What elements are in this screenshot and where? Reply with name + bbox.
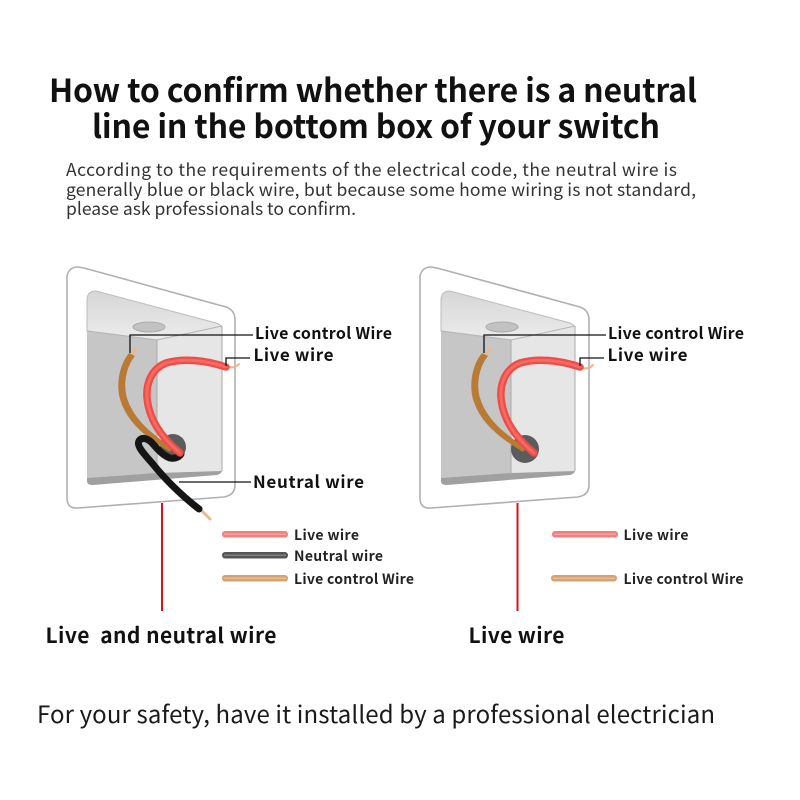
- red live wire: [147, 360, 239, 453]
- brown live control wire: [118, 349, 173, 452]
- label: live wire: Live wire: [608, 341, 688, 366]
- red connector line: [516, 503, 518, 611]
- red live wire: [501, 360, 593, 453]
- legend: Neutral wire: [294, 546, 383, 566]
- legend: [551, 525, 744, 589]
- intro text block: please ask professionals to confirm.: [66, 196, 356, 221]
- caption: live and neutral wire: Live and neutral wire: [46, 620, 276, 650]
- caption: live wire: Live wire: [468, 620, 564, 650]
- legend: Live wire: [294, 525, 359, 545]
- legend: [222, 525, 414, 589]
- panel: live wire only diagram: [420, 267, 744, 650]
- label: live wire: Live wire: [254, 341, 334, 366]
- switch box plate: [420, 267, 589, 508]
- cable hole: [511, 435, 539, 463]
- label: neutral wire: Neutral wire: [253, 468, 364, 493]
- legend: Live control Wire: [624, 569, 744, 589]
- legend: Live wire: [624, 525, 688, 545]
- switch box plate: [67, 267, 235, 508]
- cable hole: [160, 434, 186, 460]
- label: live control wire: Live control Wire: [608, 320, 744, 344]
- leader lines: [130, 335, 253, 482]
- box interior: [87, 291, 222, 485]
- title: line in the bottom box of your switch: [92, 102, 660, 148]
- panel: live and neutral wire diagram: [46, 267, 414, 650]
- brown live control wire: [471, 349, 526, 452]
- intro text block: According to the requirements of the electrical code, the neutral wire is: [66, 157, 677, 182]
- safety note: For your safety, have it installed by a professional electrician: [37, 695, 715, 730]
- black neutral wire: [138, 438, 210, 519]
- box interior: [441, 291, 575, 485]
- label: live control wire: Live control Wire: [255, 320, 392, 344]
- leader lines: [484, 335, 606, 366]
- legend: Live control Wire: [294, 569, 414, 589]
- intro text block: generally blue or black wire, but because some home wiring is not standard,: [66, 177, 696, 202]
- title: How to confirm whether there is a neutral: [49, 66, 697, 112]
- intro text block: [66, 157, 696, 221]
- title: [49, 66, 697, 148]
- red connector line: [161, 503, 163, 611]
